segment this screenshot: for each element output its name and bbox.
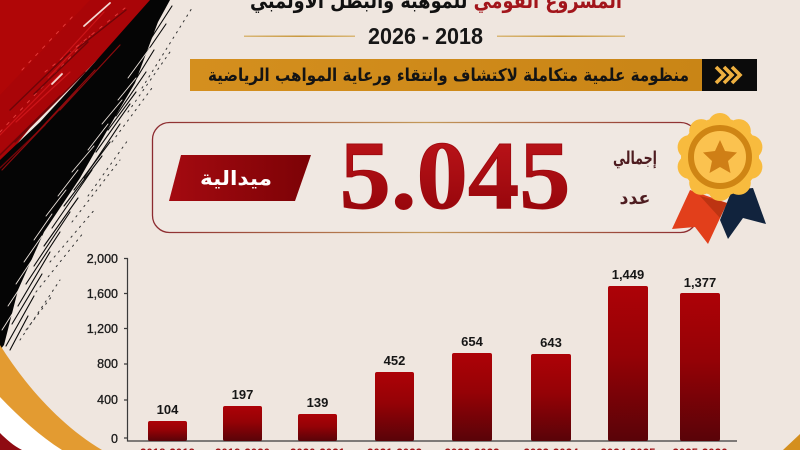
bottom-left corner bands (0, 345, 102, 450)
medal label badge: ميدالية (200, 166, 272, 190)
total label: عدد (620, 188, 650, 209)
y axis: 1,600 (87, 287, 118, 301)
total label (613, 148, 657, 209)
value labels: 654 (461, 334, 484, 349)
brush stroke decoration (0, 0, 192, 350)
total number: 5.045 (340, 122, 570, 230)
value labels: 452 (384, 353, 405, 368)
bottom-right corner accent (783, 434, 800, 450)
value labels: 1,449 (612, 267, 644, 282)
value labels: 104 (157, 402, 179, 417)
value labels (157, 267, 716, 417)
total label: إجمالي (613, 148, 657, 169)
y axis: 400 (97, 393, 118, 407)
bars (148, 286, 720, 441)
y axis: 1,200 (87, 322, 118, 336)
value labels: 139 (307, 395, 328, 410)
icon: chevrons (716, 67, 740, 83)
bar chart: medals per season (87, 252, 737, 450)
fringe of black strokes past the edge (6, 6, 172, 350)
value labels: 643 (540, 335, 562, 350)
y axis: 800 (97, 357, 118, 371)
y axis (87, 252, 737, 446)
subtitle banner (190, 59, 757, 91)
icon: medal with ribbons (672, 113, 766, 244)
subtitle banner: منظومة علمية متكاملة لاكتشاف وانتقاء ورعاية المواهب الرياضية (208, 66, 689, 86)
season labels (140, 448, 728, 450)
value labels: 197 (232, 387, 253, 402)
y axis: 2,000 (87, 252, 118, 266)
y axis: 0 (111, 432, 118, 446)
date range: 2026 - 2018 (368, 23, 483, 49)
value labels: 1,377 (684, 275, 716, 290)
panel: total medals (152, 122, 698, 232)
medal label badge (169, 155, 311, 201)
